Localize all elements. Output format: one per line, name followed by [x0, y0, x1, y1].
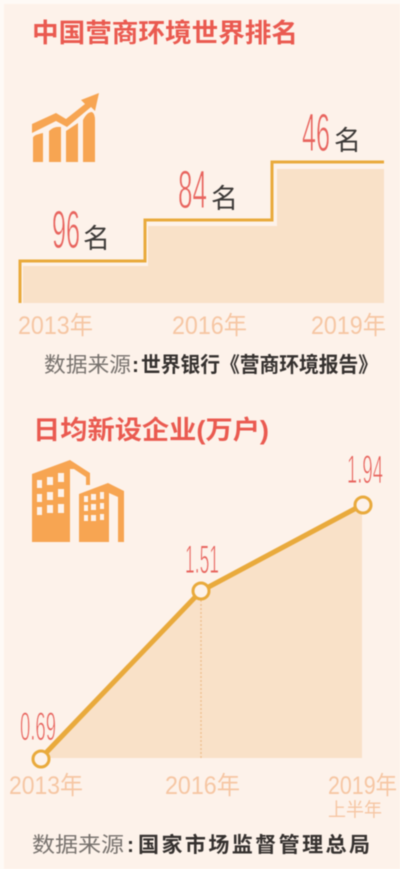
value: 96 rank: 96: [52, 200, 80, 260]
line: [41, 505, 362, 758]
point 2019: [355, 497, 371, 513]
title: new enterprises: 日均新设企业(万户): [33, 415, 269, 445]
source: SAMR: 数据来源: [32, 834, 124, 857]
value: 84 rank: 84: [178, 160, 207, 220]
icon: rising bar chart: [32, 93, 99, 162]
x-axis labels: new enterprises: [9, 772, 397, 821]
x-axis labels: new enterprises: 2016年: [165, 772, 240, 800]
icon: buildings: [32, 460, 124, 542]
line chart: new enterprises: [33, 497, 371, 767]
step area fill: [23, 169, 384, 303]
source: World Bank: :: [132, 354, 139, 377]
value: 84 rank: 名: [211, 184, 238, 214]
point 2013: [33, 751, 49, 767]
area fill: [41, 505, 362, 758]
value: 96 rank: 名: [83, 224, 110, 254]
source: SAMR: 国家市场监督管理总局: [138, 833, 370, 857]
title: ranking: 中国营商环境世界排名: [32, 18, 298, 48]
dotted guide: [200, 600, 202, 758]
text: 0.69: [20, 705, 56, 749]
x-axis labels: new enterprises: 2013年: [9, 772, 83, 800]
value: 46 rank: 名: [334, 126, 361, 156]
source: World Bank: 世界银行《营商环境报告》: [141, 354, 378, 377]
point 2016: [193, 583, 209, 599]
x-axis labels: ranking: 2016年: [172, 312, 247, 340]
x-axis labels: ranking: [18, 312, 386, 340]
step chart: ranking: [20, 162, 384, 303]
step line: [20, 162, 384, 303]
value: 46 rank: 46: [302, 103, 330, 163]
source: SAMR: [32, 833, 370, 857]
source: World Bank: 数据来源: [44, 354, 131, 377]
source: World Bank: [44, 354, 378, 377]
text: 1.51: [185, 538, 219, 582]
x-axis labels: ranking: 2019年: [311, 312, 386, 340]
source: SAMR: :: [127, 834, 134, 857]
x-axis labels: ranking: 2013年: [18, 312, 93, 340]
x-axis labels: new enterprises: 上半年: [328, 799, 382, 821]
